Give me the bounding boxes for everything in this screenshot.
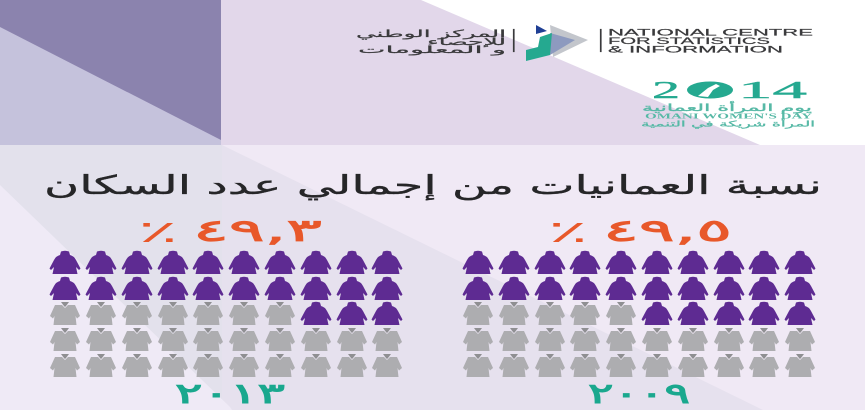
Omani Women's Day 2014 emblem: 2	[652, 78, 680, 104]
emblem circle	[687, 82, 733, 98]
logo text: English name: NATIONAL CENTRE	[608, 28, 813, 38]
percentage 49.5	[548, 213, 732, 250]
Omani Women's Day 2014 emblem	[641, 78, 815, 128]
percentage 49.3: ٪	[138, 215, 178, 250]
Omani Women's Day 2014 emblem: المرأة شريكة في التنمية	[641, 118, 815, 128]
pictogram: 2013 women	[50, 251, 402, 377]
Omani Women's Day 2014 emblem: 14	[738, 78, 807, 104]
year 2009: ٢٠٠٩	[588, 377, 690, 410]
panel: 2009	[462, 213, 816, 410]
logo: National Centre for Statistics and Information	[356, 25, 813, 61]
year 2013: ٢٠١٣	[175, 377, 285, 410]
logo text: English name	[600, 28, 813, 54]
percentage 49.5: ٪	[548, 215, 588, 250]
logo text: Arabic name	[356, 29, 514, 56]
logo text: Arabic name: و المعلومات	[358, 45, 506, 56]
logo mark	[526, 25, 588, 61]
pictogram: 2009 women	[462, 251, 816, 377]
logo text: English name: FOR STATISTICS	[608, 36, 770, 46]
percentage 49.5: ٤٩,٥	[603, 213, 732, 249]
title: نسبة العمانيات من إجمالي عدد السكان	[44, 171, 822, 201]
percentage 49.3: ٤٩,٣	[193, 213, 322, 249]
logo text: English name: & INFORMATION	[608, 44, 783, 54]
panel: 2013	[50, 213, 402, 410]
percentage 49.3	[138, 213, 322, 250]
logo text: Arabic name: للإحصاء	[427, 37, 506, 48]
Omani Women's Day 2014 emblem: يوم المرأة العمانية	[642, 101, 812, 114]
logo text: Arabic name: المركز الوطني	[356, 29, 506, 40]
Omani Women's Day 2014 emblem: OMANI WOMEN'S DAY	[645, 112, 812, 120]
